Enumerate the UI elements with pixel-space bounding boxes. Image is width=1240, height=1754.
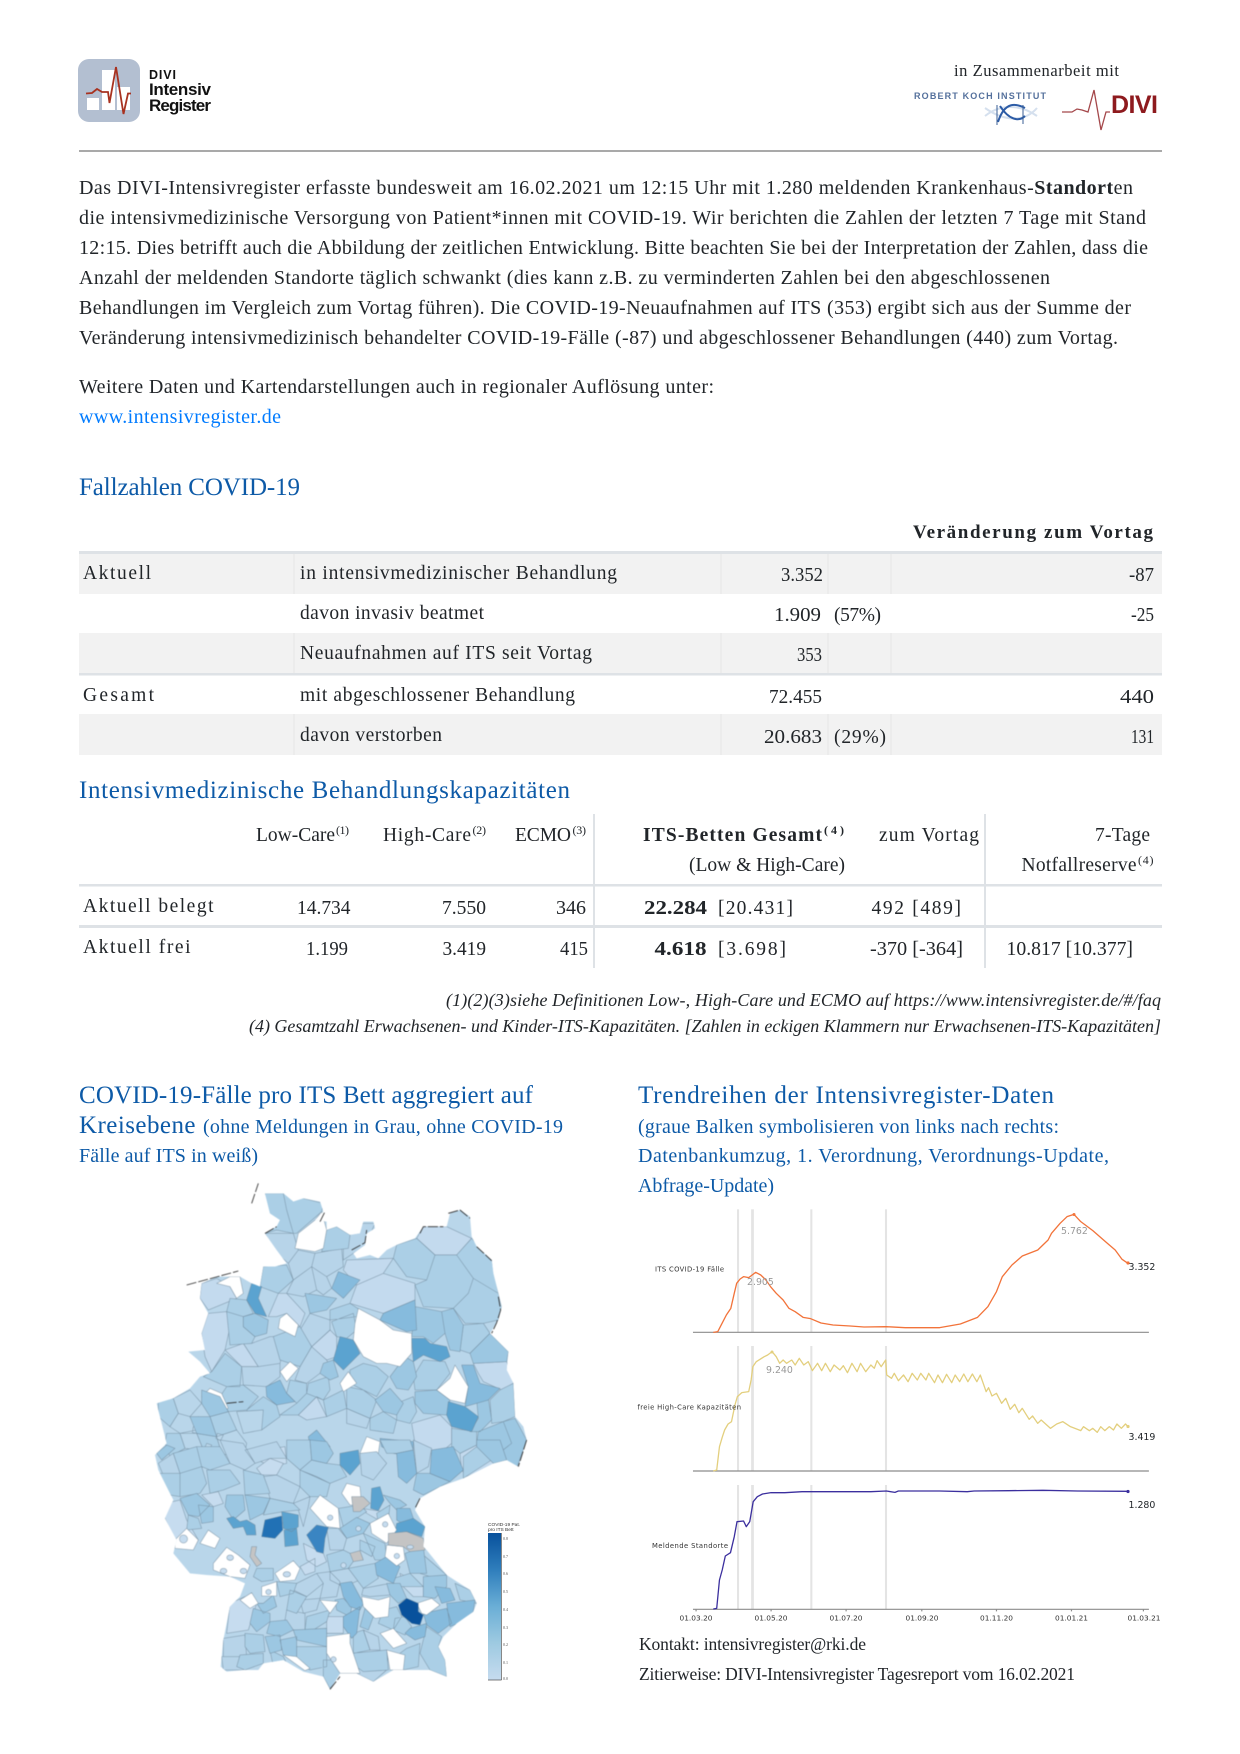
table: Kapazitäten: 3.419 <box>442 939 486 960</box>
table: Kapazitäten: ECMO <box>515 825 571 846</box>
map legend: 0.1 <box>503 1660 508 1665</box>
table: Kapazitäten: (Low & High-Care) <box>689 855 845 876</box>
table: Kapazitäten: Low-Care <box>256 825 335 846</box>
intro text: die intensivmedizinische Versorgung von Patient*innen mit COVID-19. Wir berichten die Zahlen der letzten 7 Tage mit Stand <box>79 207 1146 229</box>
table: Fallzahlen: 131 <box>1131 727 1154 748</box>
table: Kapazitäten: [20.431] <box>718 898 793 919</box>
heading: trends: Abfrage-Update) <box>638 1175 774 1197</box>
partner logos: ROBERT KOCH INSTITUT <box>914 91 1046 101</box>
heading: map <box>79 1082 563 1167</box>
further data text and link <box>79 376 714 428</box>
table: Fallzahlen: 72.455 <box>769 687 822 708</box>
table: Kapazitäten: Notfallreserve <box>1022 855 1136 876</box>
chart: Meldende Standorte: 01.01.21 <box>1055 1614 1088 1622</box>
further data text and link: Weitere Daten und Kartendarstellungen auch in regionaler Auflösung unter: <box>79 376 714 398</box>
chart: Meldende Standorte: 1.280 <box>1128 1500 1155 1511</box>
heading: map: Fälle auf ITS in weiß) <box>79 1145 258 1167</box>
map legend: 0.5 <box>503 1589 508 1594</box>
intro text: Veränderung intensivmedizinisch behandelter COVID-19-Fälle (-87) und abgeschlossener Behandlungen (440) zum Vortag. <box>79 327 1118 349</box>
chart: ITS COVID-19 Fälle: 3.352 <box>1128 1262 1155 1273</box>
table: Kapazitäten: 14.734 <box>297 898 351 919</box>
intro text: Das DIVI-Intensivregister erfasste bundesweit am 16.02.2021 um 12:15 Uhr mit 1.280 meldenden Krankenhaus-Standorten <box>79 177 1133 199</box>
table: Fallzahlen: davon verstorben <box>300 725 442 746</box>
chart: Meldende Standorte: Meldende Standorte <box>652 1542 728 1550</box>
partner logos: in Zusammenarbeit mit <box>954 61 1119 80</box>
logo: DIVI Intensiv Register: Intensiv <box>149 80 212 99</box>
table: Fallzahlen: 353 <box>797 645 822 666</box>
chart: Meldende Standorte <box>652 1485 1161 1622</box>
chart: ITS COVID-19 Fälle: ITS COVID-19 Fälle <box>655 1266 724 1274</box>
table: Kapazitäten: (3) <box>572 823 586 837</box>
table: Fallzahlen: -87 <box>1129 565 1154 586</box>
map legend: 0.3 <box>503 1625 508 1630</box>
table: Kapazitäten: Aktuell belegt <box>83 896 214 917</box>
table: Fallzahlen: davon invasiv beatmet <box>300 603 485 624</box>
intro text <box>79 177 1148 349</box>
table: Kapazitäten: ITS-Betten Gesamt <box>643 825 822 846</box>
table: Fallzahlen: Gesamt <box>83 685 155 706</box>
chart: Meldende Standorte: 01.07.20 <box>830 1614 863 1622</box>
heading: map: (ohne Meldungen in Grau, ohne COVID-19 <box>203 1116 563 1138</box>
table: Fallzahlen: Neuaufnahmen auf ITS seit Vortag <box>300 643 592 664</box>
heading: trends: Datenbankumzug, 1. Verordnung, Verordnungs-Update, <box>638 1145 1109 1167</box>
table: Fallzahlen: (29%) <box>834 727 886 748</box>
map legend: 0.0 <box>503 1676 508 1681</box>
chart: Meldende Standorte: 01.11.20 <box>980 1614 1013 1622</box>
map legend: COVID-19 Pat. <box>488 1522 520 1528</box>
table: Kapazitäten: 492 [489] <box>872 898 961 919</box>
heading: trends: (graue Balken symbolisieren von links nach rechts: <box>638 1116 1059 1138</box>
contact and citation: Kontakt: intensivregister@rki.de <box>639 1634 866 1654</box>
footnotes <box>249 990 1161 1037</box>
chart: ITS COVID-19 Fälle <box>655 1209 1155 1332</box>
table: Kapazitäten: (4) <box>824 823 844 837</box>
table: Kapazitäten <box>79 814 1162 968</box>
map legend: 0.6 <box>503 1571 508 1576</box>
map legend <box>488 1522 520 1681</box>
table: Fallzahlen: 20.683 <box>764 727 822 748</box>
partner logos: DIVI <box>1111 91 1158 119</box>
table: Fallzahlen: Veränderung zum Vortag <box>913 522 1154 543</box>
map legend: 0.7 <box>503 1554 508 1559</box>
table: Fallzahlen: 1.909 <box>774 605 821 626</box>
south districts <box>158 1440 507 1688</box>
table: Kapazitäten: [3.698] <box>718 939 786 960</box>
table: Kapazitäten: 1.199 <box>306 939 348 960</box>
table: Fallzahlen: 440 <box>1120 687 1154 708</box>
chart: freie High-Care Kapazitäten: 3.419 <box>1128 1432 1155 1443</box>
logo: DIVI Intensiv Register <box>78 59 212 122</box>
intro text: Behandlungen im Vergleich zum Vortag führen). Die COVID-19-Neuaufnahmen auf ITS (353) ergibt sich aus der Summe der <box>79 297 1131 319</box>
map legend: 0.4 <box>503 1607 508 1612</box>
table: Kapazitäten: 10.817 [10.377] <box>1006 939 1133 960</box>
table: Kapazitäten: 346 <box>556 898 586 919</box>
table: Fallzahlen: mit abgeschlossener Behandlung <box>300 685 575 706</box>
logo: DIVI Intensiv Register: Register <box>149 96 211 115</box>
heading: Kapazitäten: Intensivmedizinische Behandlungskapazitäten <box>79 777 570 804</box>
footnotes: (4) Gesamtzahl Erwachsenen- und Kinder-ITS-Kapazitäten. [Zahlen in eckigen Klammern nur Erwachsenen-ITS-Kapazitäten] <box>249 1016 1161 1037</box>
west cluster districts <box>157 1390 287 1467</box>
map legend: 0.8 <box>503 1536 508 1541</box>
further data text and link: www.intensivregister.de <box>79 406 281 428</box>
chart: Meldende Standorte: 01.03.20 <box>680 1614 713 1622</box>
north and central districts <box>200 1193 527 1477</box>
chart: ITS COVID-19 Fälle: 5.762 <box>1061 1226 1088 1237</box>
chart: Meldende Standorte: 01.05.20 <box>754 1614 788 1622</box>
map legend: 0.2 <box>503 1642 508 1647</box>
chart: ITS COVID-19 Fälle: 2.905 <box>747 1277 774 1288</box>
table: Kapazitäten: High-Care <box>383 825 471 846</box>
table: Kapazitäten: 7.550 <box>442 898 486 919</box>
table: Kapazitäten: (2) <box>472 823 486 837</box>
table: Fallzahlen: 3.352 <box>781 565 823 586</box>
header rule <box>79 150 1162 152</box>
coast shadow strokes <box>187 1183 527 1689</box>
table: Kapazitäten: (1) <box>336 823 349 837</box>
logo: DIVI Intensiv Register: DIVI <box>149 68 176 82</box>
chart: freie High-Care Kapazitäten <box>638 1346 1155 1471</box>
chart: Meldende Standorte: 01.09.20 <box>906 1614 939 1622</box>
table: Kapazitäten: (4) <box>1138 853 1154 867</box>
map legend: pro ITS Bett <box>488 1527 514 1533</box>
contact and citation <box>639 1634 1075 1684</box>
heading: map: Kreisebene <box>79 1112 196 1139</box>
table: Fallzahlen: -25 <box>1131 605 1154 626</box>
table: Kapazitäten: -370 [-364] <box>870 939 963 960</box>
intro text: 12:15. Dies betrifft auch die Abbildung der zeitlichen Entwicklung. Bitte beachten Sie bei der Interpretation der Zahlen, dass die <box>79 237 1148 259</box>
table: Kapazitäten: zum Vortag <box>879 825 979 846</box>
intro text: Anzahl der meldenden Standorte täglich schwankt (dies kann z.B. zu verminderten Zahlen bei den abgeschlossenen <box>79 267 1050 289</box>
table: Kapazitäten: 7-Tage <box>1095 825 1150 846</box>
table: Fallzahlen: (57%) <box>834 605 881 626</box>
contact and citation: Zitierweise: DIVI-Intensivregister Tagesreport vom 16.02.2021 <box>639 1664 1075 1684</box>
heading: map: COVID-19-Fälle pro ITS Bett aggregiert auf <box>79 1082 534 1109</box>
table: Kapazitäten: Aktuell frei <box>83 937 191 958</box>
map: Germany districts <box>150 1183 533 1697</box>
chart: Meldende Standorte: 01.03.21 <box>1128 1614 1161 1622</box>
table: Fallzahlen: in intensivmedizinischer Behandlung <box>300 563 617 584</box>
heading: trends <box>638 1082 1109 1197</box>
table: Kapazitäten: 4.618 <box>654 939 707 960</box>
heading: Fallzahlen: Fallzahlen COVID-19 <box>79 474 300 501</box>
partner logos <box>914 61 1158 130</box>
chart: freie High-Care Kapazitäten: freie High-Care Kapazitäten <box>638 1404 741 1412</box>
table: Kapazitäten: 415 <box>560 939 588 960</box>
table: Kapazitäten: 22.284 <box>644 898 707 919</box>
footnotes: (1)(2)(3)siehe Definitionen Low-, High-Care und ECMO auf https://www.intensivregister.de/#/faq <box>446 990 1161 1011</box>
table: Fallzahlen <box>79 522 1162 755</box>
chart: freie High-Care Kapazitäten: 9.240 <box>766 1365 793 1376</box>
table: Fallzahlen: Aktuell <box>83 563 152 584</box>
heading: trends: Trendreihen der Intensivregister-Daten <box>638 1082 1054 1109</box>
